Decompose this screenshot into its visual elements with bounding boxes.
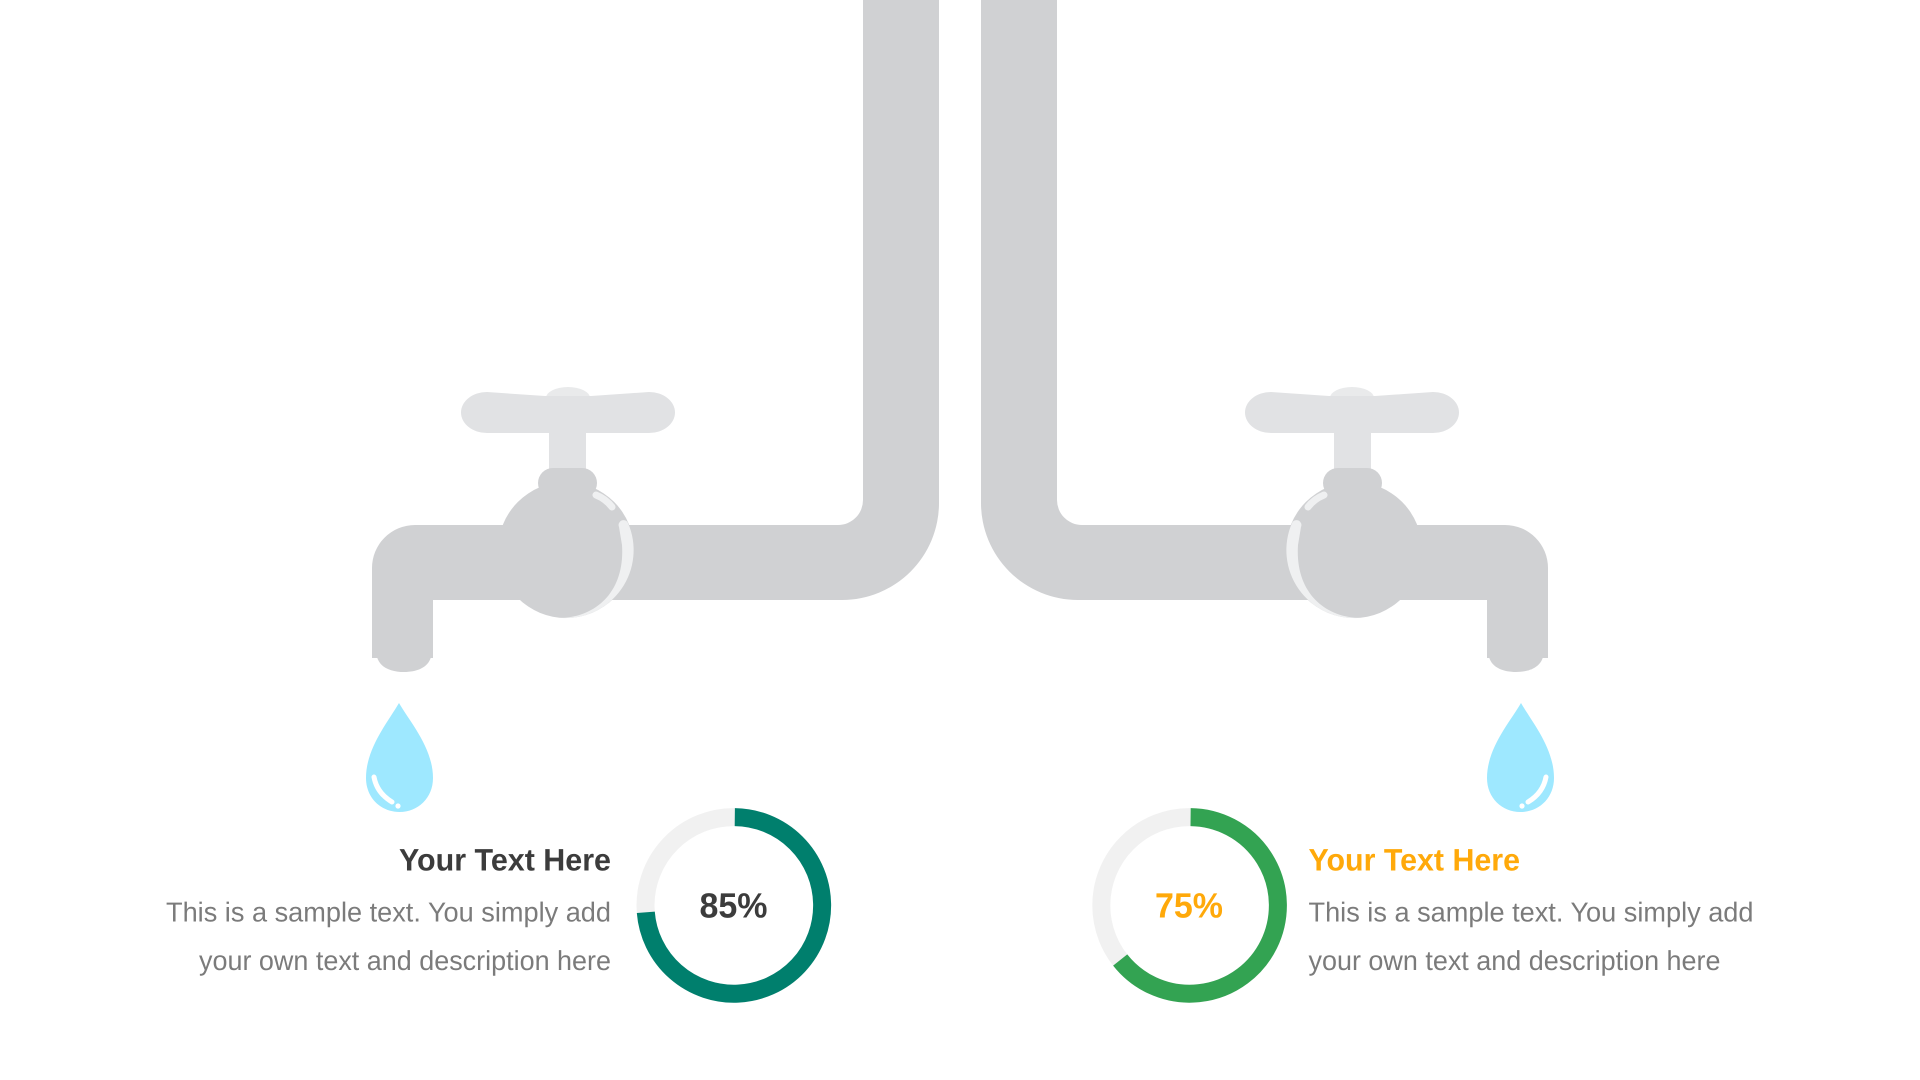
right valve cap — [1323, 468, 1382, 498]
right heading: Your Text Here — [1308, 842, 1520, 878]
left handle stem — [549, 430, 586, 472]
panel: right text block — [1308, 842, 1754, 976]
left pipe — [372, 0, 939, 658]
right valve ball — [1286, 482, 1422, 618]
left valve cap — [538, 468, 597, 498]
chart: left donut 85% — [646, 817, 822, 994]
icon: left water drop — [366, 703, 433, 812]
panel: right faucet — [981, 0, 1548, 672]
left handle bar — [461, 392, 675, 433]
icon: right water drop — [1487, 703, 1554, 812]
right valve crescent highlight — [1286, 520, 1358, 618]
right nozzle — [1489, 657, 1543, 672]
left description line 1: This is a sample text. You simply add — [166, 896, 611, 928]
left nozzle — [377, 657, 431, 672]
right valve small highlight — [1308, 495, 1324, 507]
left description line 2: your own text and description here — [199, 945, 611, 976]
panel: left faucet — [372, 0, 939, 672]
chart: right donut 75% — [1101, 817, 1278, 994]
right handle knob — [1330, 387, 1374, 409]
left percentage: 85% — [700, 886, 768, 926]
left heading: Your Text Here — [399, 842, 611, 878]
right pipe — [981, 0, 1548, 658]
left valve crescent highlight — [562, 520, 634, 618]
left valve small highlight — [596, 495, 612, 507]
right handle stem — [1334, 430, 1371, 472]
right description line 1: This is a sample text. You simply add — [1308, 896, 1754, 928]
panel: left text block — [166, 842, 611, 976]
right description line 2: your own text and description here — [1308, 945, 1720, 976]
left valve ball — [498, 482, 634, 618]
left handle knob — [546, 387, 590, 409]
right handle bar — [1245, 392, 1459, 433]
right percentage: 75% — [1155, 886, 1223, 926]
